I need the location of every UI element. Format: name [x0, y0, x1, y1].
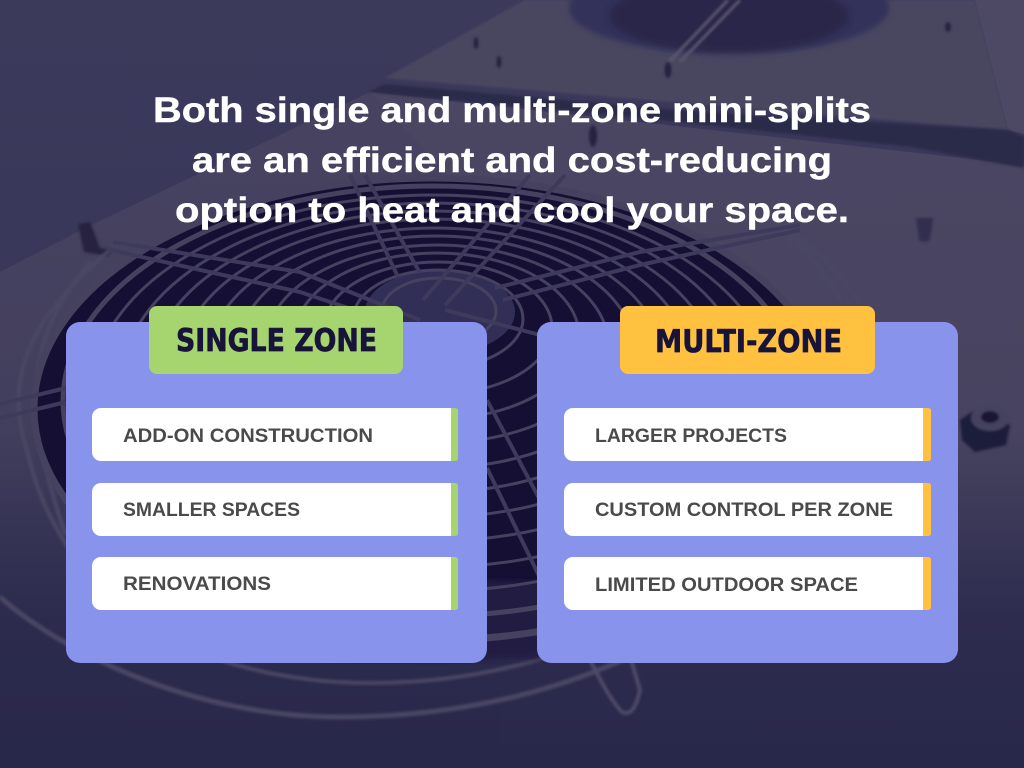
- title: are an efficient and cost-reducing: [192, 141, 832, 180]
- list item: custom control per zone: CUSTOM CONTROL PER ZONE: [595, 500, 893, 521]
- list item: add-on construction: [92, 408, 458, 461]
- list item: smaller spaces: SMALLER SPACES: [123, 500, 300, 521]
- title: [153, 91, 871, 230]
- list item: custom control per zone: [564, 483, 931, 536]
- badge: single zone: SINGLE ZONE: [176, 323, 377, 359]
- list item: smaller spaces: [92, 483, 458, 536]
- badge: single zone: [149, 306, 403, 374]
- list item: larger projects: [564, 408, 931, 461]
- list item: limited outdoor space: [564, 557, 931, 610]
- badge: multi-zone: [620, 306, 875, 374]
- list item: renovations: RENOVATIONS: [123, 574, 271, 595]
- title: Both single and multi-zone mini-splits: [153, 91, 871, 130]
- list item: larger projects: LARGER PROJECTS: [595, 426, 787, 447]
- list item: limited outdoor space: LIMITED OUTDOOR SPACE: [595, 575, 858, 596]
- title: option to heat and cool your space.: [175, 191, 849, 230]
- list item: add-on construction: ADD-ON CONSTRUCTION: [123, 426, 373, 447]
- panel: multi-zone: [537, 306, 958, 663]
- badge: multi-zone: MULTI-ZONE: [655, 324, 842, 360]
- list item: renovations: [92, 557, 458, 610]
- panel: single zone: [66, 306, 487, 663]
